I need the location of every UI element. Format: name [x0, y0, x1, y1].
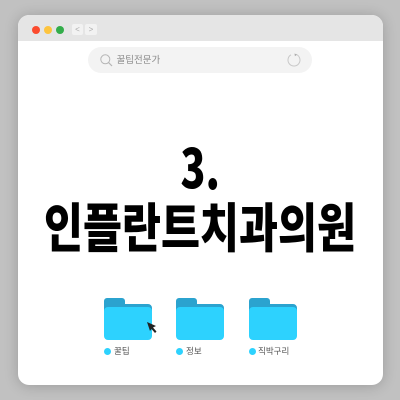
icon: reload — [288, 54, 300, 66]
folder label: 정보 — [176, 346, 202, 356]
folder label: 정보: 정보 — [186, 346, 202, 356]
folder label: 직박구리: 직박구리 — [258, 346, 289, 356]
heading: number: 3. — [180, 125, 220, 204]
back button — [72, 24, 83, 35]
folder label: 꿀팁: 꿀팁 — [114, 346, 130, 356]
search bar — [88, 47, 312, 72]
folder: 정보 — [176, 298, 224, 340]
window control: green — [56, 26, 64, 34]
forward button: > — [89, 25, 93, 34]
window control: yellow — [44, 26, 52, 34]
back button: < — [75, 25, 80, 34]
icon: search — [100, 54, 112, 66]
search text: 꿀팁전문가 — [116, 54, 160, 66]
folder: 직박구리 — [249, 298, 297, 340]
heading: title: 인플란트치과의원 — [44, 187, 356, 263]
window control: red — [32, 26, 40, 34]
folder: 꿀팁 — [104, 298, 152, 340]
forward button — [85, 24, 97, 35]
title bar — [18, 15, 382, 41]
folder label: 꿀팁 — [104, 346, 130, 356]
icon: cursor — [147, 322, 156, 333]
